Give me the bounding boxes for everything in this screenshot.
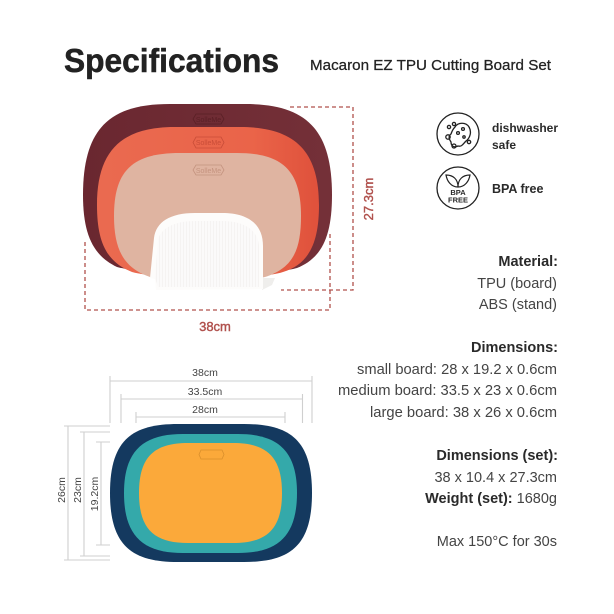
max temperature note: Max 150°C for 30s (437, 534, 557, 550)
logo mark (199, 450, 224, 459)
material block: TPU (board) (477, 276, 557, 292)
dimensions block: small board: 28 x 19.2 x 0.6cm (357, 362, 557, 378)
stand base tab (262, 278, 275, 290)
dimensions block: large board: 38 x 26 x 0.6cm (370, 405, 557, 421)
subtitle: Macaron EZ TPU Cutting Board Set (310, 58, 551, 74)
height labels: 26cm (56, 477, 68, 503)
width labels (188, 367, 222, 416)
material block: ABS (stand) (479, 297, 557, 313)
height labels: 19.2cm (89, 477, 101, 511)
product photo: stacked boards in stand: SolleMe (196, 168, 221, 175)
label: 27.3cm: 27.3cm (361, 178, 376, 220)
orange small board (139, 443, 282, 543)
dishwasher safe text: dishwasher (492, 121, 558, 135)
set dimensions and weight block: Dimensions (set): (436, 448, 558, 464)
logo marks (193, 114, 224, 175)
ribbed stand face (155, 221, 259, 287)
height labels: 23cm (72, 477, 84, 503)
dimensions block (338, 340, 558, 421)
icon: dishwasher safe (437, 113, 479, 155)
material block (477, 254, 558, 313)
icon: BPA free: FREE (448, 196, 468, 204)
width labels: 33.5cm (188, 386, 222, 398)
product photo: stacked boards in stand: SolleMe (196, 117, 221, 124)
width dimension lines (110, 376, 312, 423)
title: Specifications (64, 42, 279, 79)
dimensions block: medium board: 33.5 x 23 x 0.6cm (338, 383, 557, 399)
icon: BPA free: BPA (450, 188, 466, 197)
height dimension lines (64, 426, 110, 560)
navy large board (110, 424, 312, 562)
dimensions block: Dimensions: (471, 340, 558, 356)
small beige board (114, 153, 301, 281)
icon: BPA free (437, 167, 479, 209)
dashed height bracket (281, 107, 353, 290)
medium coral board (97, 127, 319, 278)
width labels: 38cm (192, 367, 218, 379)
large maroon board (83, 104, 332, 274)
set dimensions and weight block: Weight (set): 1680g (425, 491, 557, 507)
white stand (150, 213, 263, 290)
product photo: stacked boards in stand (83, 104, 332, 290)
dishwasher safe text: safe (492, 138, 516, 152)
material block: Material: (498, 254, 558, 270)
BPA free text: BPA free (492, 182, 543, 196)
set dimensions and weight block (425, 448, 558, 507)
set dimensions and weight block: 38 x 10.4 x 27.3cm (434, 470, 557, 486)
label: 38cm: 38cm (199, 319, 231, 334)
dashed width bracket (85, 232, 330, 310)
teal medium board (124, 434, 297, 553)
height labels (56, 477, 101, 511)
width labels: 28cm (192, 404, 218, 416)
product photo: stacked boards in stand: SolleMe (196, 140, 221, 147)
nested boards top view (110, 424, 312, 562)
